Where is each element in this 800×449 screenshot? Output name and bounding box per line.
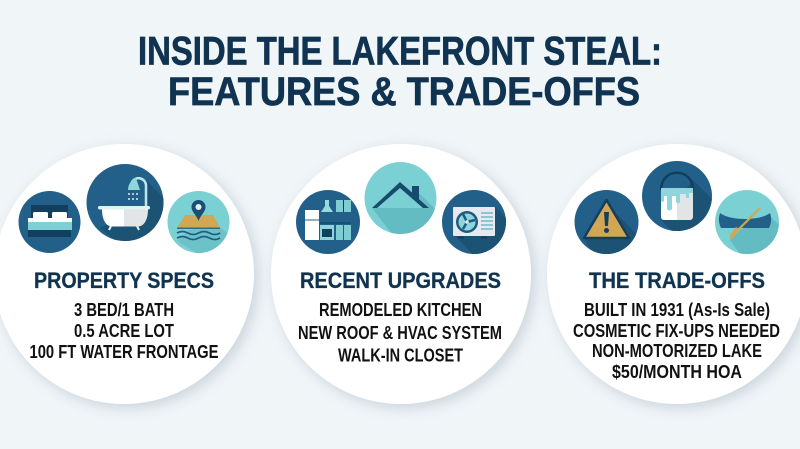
title: INSIDE THE LAKEFRONT STEAL: [138, 30, 662, 74]
text: recent upgrades list: REMODELED KITCHEN [319, 300, 482, 320]
heading: property specs: PROPERTY SPECS [34, 268, 214, 293]
text: trade-offs list: $50/MONTH HOA [612, 362, 742, 382]
panel: recent upgrades [271, 144, 531, 404]
text: recent upgrades list [298, 300, 502, 366]
icon: paint bucket [642, 161, 712, 231]
icon: bathtub with shower [86, 164, 164, 241]
icon: canoe with paddle [715, 190, 779, 254]
icon: waterfront map pin [168, 191, 230, 255]
icon: bed [18, 191, 80, 253]
text: recent upgrades list: NEW ROOF & HVAC SYSTEM [298, 323, 502, 343]
text: trade-offs list [573, 300, 780, 382]
icon: roof [364, 162, 436, 234]
text: recent upgrades list: WALK-IN CLOSET [338, 346, 463, 366]
panel: property specs [0, 144, 254, 404]
text: property specs list: 3 BED/1 BATH [74, 300, 174, 320]
text: property specs list: 0.5 ACRE LOT [74, 321, 174, 341]
heading: recent upgrades: RECENT UPGRADES [300, 268, 501, 293]
icon: HVAC unit [442, 190, 506, 254]
text: trade-offs list: NON-MOTORIZED LAKE [592, 341, 762, 361]
text: property specs list [30, 300, 218, 362]
text: property specs list: 100 FT WATER FRONTAGE [30, 342, 218, 362]
icon: kitchen [296, 190, 360, 254]
panel: the trade-offs [547, 144, 800, 404]
title [138, 30, 662, 114]
title: FEATURES & TRADE-OFFS [168, 70, 640, 114]
icon: warning triangle [574, 190, 640, 258]
heading: the trade-offs: THE TRADE-OFFS [589, 268, 765, 293]
